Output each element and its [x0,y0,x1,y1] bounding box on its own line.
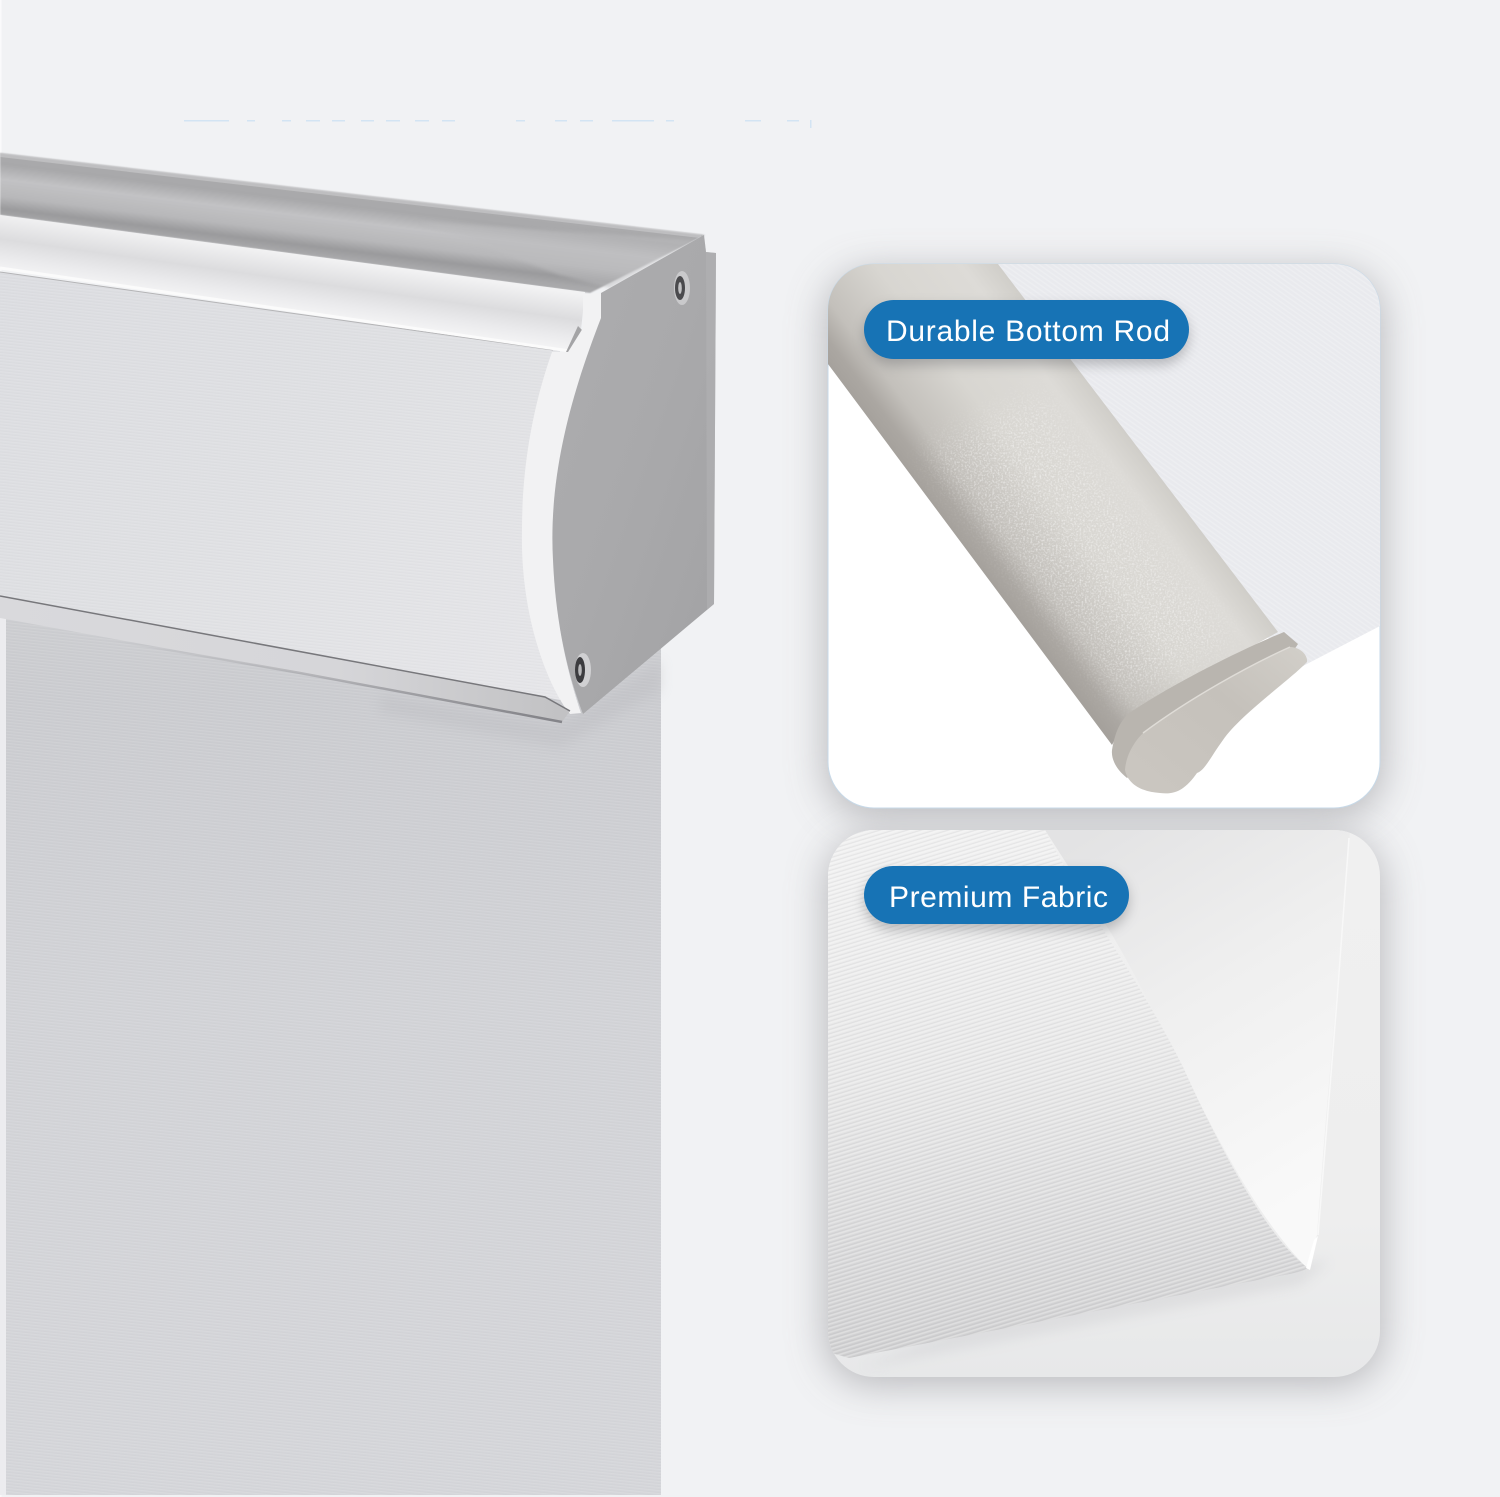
fabric sheet [998,264,1380,666]
label pill: durable bottom rod: Durable Bottom Rod [886,315,1170,348]
shared card shadow [826,272,1382,1384]
rod photo [828,264,1380,808]
faint clipped heading remnant [184,120,812,128]
valance fabric [0,272,560,700]
shadow behind sheet [914,1267,1312,1353]
label pill: durable bottom rod [864,300,1189,365]
top rail channel [0,153,705,293]
hanging fabric [0,590,661,1495]
front of the fabric [828,1056,1306,1358]
screw: bottom [575,653,591,687]
shadow under headrail [380,660,661,748]
screw: top [674,271,690,305]
rod body [828,264,1278,745]
white end cap [522,293,601,714]
grey end plate [552,235,716,714]
card base [828,830,1380,1377]
label pill: premium fabric: Premium Fabric [889,881,1108,914]
fabric photo [828,830,1350,1368]
panel: durable bottom rod [828,264,1380,808]
white front lip [0,215,585,352]
back of the sheet [1045,830,1350,1268]
rod end cap [1112,632,1307,793]
panel: roller shade product photo [0,153,716,1495]
bottom rail strip [0,596,570,722]
card base [828,264,1380,808]
label pill: premium fabric [864,866,1129,930]
panel: premium fabric [828,830,1380,1377]
